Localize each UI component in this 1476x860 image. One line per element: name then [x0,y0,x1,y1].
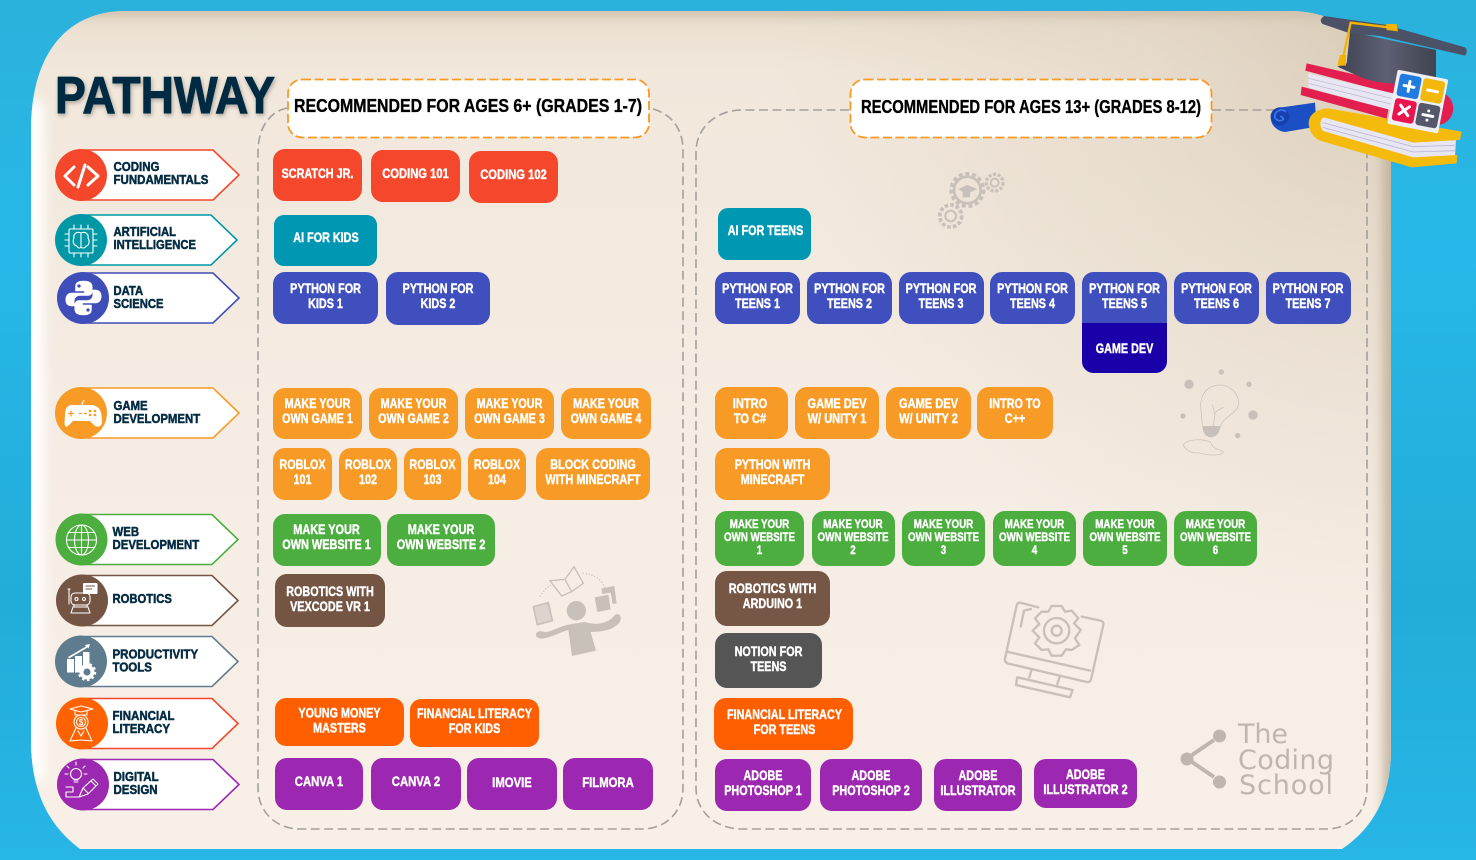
tag: financial literacy: FINANCIAL [112,708,175,723]
tag: digital design [57,758,239,810]
icon: chart and gear [67,644,95,680]
button: Website 5 teens: MAKE YOUR [1095,518,1155,531]
button: Python for Teens 3: PYTHON FOR [906,281,977,296]
tag: coding fundamentals: CODING [114,159,160,174]
button: Python for Teens 6: TEENS 6 [1194,296,1239,311]
button: Website 3 teens: OWN WEBSITE [908,531,979,544]
tag: financial literacy: LITERACY [112,721,170,736]
icon: chip brain [65,225,97,257]
button: Python for Teens 6: PYTHON FOR [1181,281,1252,296]
button: Intro to C++: C++ [1005,411,1025,426]
tag: robotics: ROBOTICS [112,591,172,606]
button: Notion for Teens: NOTION FOR [735,644,803,659]
icon: graduate with dollar [70,706,93,741]
button: Filmora [563,758,653,810]
button: Python for Teens 1 [715,272,800,324]
button: Make Your Own Game 1: OWN GAME 1 [282,411,353,426]
button: Young Money Masters: MASTERS [313,720,366,736]
tag: productivity tools: TOOLS [112,660,152,675]
button: Python with Minecraft: MINECRAFT [741,472,805,487]
button: Block Coding with Minecraft [536,448,650,500]
title: PATHWAY [55,67,275,125]
button: AI for Kids: AI FOR KIDS [293,230,359,245]
button: Scratch Jr: SCRATCH JR. [282,166,353,181]
button: Python for Kids 2: KIDS 2 [421,296,456,311]
tag: financial literacy [56,698,238,750]
left column: coding buttons [273,149,558,203]
button: Intro to C# [715,387,788,439]
button: Python for Teens 1: PYTHON FOR [722,281,793,296]
button: Website 2 teens: 2 [850,544,856,557]
button: Python for Teens 2: TEENS 2 [827,296,872,311]
button: Python for Teens 5: PYTHON FOR [1089,281,1160,296]
button: Make Your Own Website 1 [273,514,381,566]
button: Website 2 teens [812,511,895,566]
button: Notion for Teens: TEENS [750,659,787,674]
button: Website 1 teens [715,511,804,566]
button: iMovie: IMOVIE [492,775,532,790]
tag: web development [56,514,238,566]
logo: The Coding School [1180,719,1334,801]
button: Game Dev w/ Unity 1: GAME DEV [808,396,867,411]
button: Roblox 102: ROBLOX [345,457,392,472]
button: Game Dev (dark base) [1082,323,1167,373]
button: Adobe Illustrator 2: ADOBE [1066,767,1105,782]
scroll [1271,103,1317,132]
tag: data science [57,272,239,324]
tag: data science: DATA [114,283,143,298]
button: Intro to C#: INTRO [733,396,768,411]
button: Make Your Own Website 2: OWN WEBSITE 2 [397,537,485,552]
button: Make Your Own Website 2 [387,514,495,566]
icon: globe [66,525,96,555]
tag: productivity tools [55,636,238,688]
heading: ages 13+ [850,80,1212,138]
button: Python for Kids 2: PYTHON FOR [403,281,474,296]
button: Make Your Own Game 4: MAKE YOUR [573,396,639,411]
button: Python for Teens 4: TEENS 4 [1010,296,1055,311]
button: Financial Literacy for Kids [410,699,539,747]
button: Python for Teens 3 [899,272,984,324]
button: Roblox 103 [404,448,461,500]
button: Adobe Illustrator 2: ILLUSTRATOR 2 [1043,782,1128,797]
tag: game development [55,387,239,439]
button: Roblox 102 [339,448,397,500]
icon: code brackets [65,165,98,187]
logo: The Coding School: Coding [1238,745,1334,776]
watermark: monitor with gear [1005,603,1103,697]
button: Game Dev w/ Unity 1 [795,387,879,439]
tag: data science: SCIENCE [114,296,164,311]
button: Filmora: FILMORA [582,775,634,790]
button: Adobe Photoshop 2: PHOTOSHOP 2 [832,783,910,798]
icon: python logo [66,281,102,315]
button: Make Your Own Website 1: OWN WEBSITE 1 [282,537,371,552]
button: Make Your Own Game 4: OWN GAME 4 [571,411,642,426]
button: Website 1 teens: OWN WEBSITE [724,531,795,544]
watermark: lightbulb and hand [1180,369,1258,455]
button: AI for Kids [274,215,377,266]
button: Make Your Own Game 3: MAKE YOUR [477,396,543,411]
button: Robotics with VEXcode VR 1: VEXCODE VR 1 [290,599,370,614]
button: Coding 101: CODING 101 [382,166,449,181]
tag: web development: WEB [112,524,139,539]
button: Young Money Masters: YOUNG MONEY [298,705,381,721]
button: Python for Kids 2 [386,272,490,325]
button: Roblox 102: 102 [359,472,377,487]
button: Python for Teens 5: TEENS 5 [1102,296,1147,311]
button: Make Your Own Website 2: MAKE YOUR [408,522,474,537]
button: Adobe Photoshop 1 [715,759,811,811]
tag: game development: GAME [114,398,148,413]
button: Make Your Own Game 2 [369,388,458,439]
tag: game development: DEVELOPMENT [114,411,201,426]
heading: ages 6+: RECOMMENDED FOR AGES 6+ (GRADES 1-7) [294,95,642,116]
button: Python with Minecraft [715,448,830,500]
button: Robotics with Arduino 1: ARDUINO 1 [743,596,802,611]
button: Canva 2 [371,758,461,810]
button: Financial Literacy for Teens: FINANCIAL LITERACY [727,707,842,722]
button: Python for Teens 5 [1082,272,1167,323]
logo: The Coding School: The [1237,719,1288,750]
button: iMovie [467,758,557,810]
button: AI for Teens: AI FOR TEENS [728,223,803,238]
button: Block Coding with Minecraft: WITH MINECRAFT [545,472,641,487]
button: Game Dev w/ Unity 1: W/ UNITY 1 [808,411,867,426]
button: Website 3 teens: MAKE YOUR [914,518,973,531]
button: Roblox 103: 103 [423,472,442,487]
right dashed frame [696,110,1367,829]
button: Make Your Own Game 1 [273,388,362,439]
tag: coding fundamentals [55,149,239,201]
heading: ages 6+ [288,80,649,138]
button: Canva 2: CANVA 2 [392,774,440,789]
button: Website 4 teens: 4 [1032,544,1038,557]
button: Website 3 teens [902,511,985,566]
button: Robotics with VEXcode VR 1 [275,574,385,627]
button: Roblox 103: ROBLOX [409,457,456,472]
button: Game Dev w/ Unity 2: GAME DEV [899,396,959,411]
button: Make Your Own Game 3: OWN GAME 3 [474,411,545,426]
button: Make Your Own Game 3 [465,388,554,439]
logo: The Coding School: School [1239,770,1333,801]
yellow book [1309,108,1462,167]
red book [1301,63,1453,125]
button: Scratch Jr [273,149,362,201]
button: Game Dev w/ Unity 2: W/ UNITY 2 [899,411,958,426]
tag: digital design: DIGITAL [114,769,159,784]
button: Adobe Photoshop 2 [820,759,922,811]
button: Python for Teens 6 [1174,272,1259,324]
button: Python for Teens 4 [990,272,1075,324]
button: AI for Teens [718,208,811,260]
button: Python for Teens 3: TEENS 3 [918,296,964,311]
button: Adobe Illustrator 2 [1034,759,1137,808]
button: Website 4 teens: MAKE YOUR [1005,518,1064,531]
button: Block Coding with Minecraft: BLOCK CODING [550,457,636,472]
button: Website 5 teens [1083,511,1167,566]
button: Adobe Photoshop 1: ADOBE [744,768,782,783]
button: Notion for Teens [715,633,822,688]
button: Make Your Own Game 2: OWN GAME 2 [378,411,449,426]
watermark: gears with cap [940,174,1003,227]
tag: artificial intelligence: ARTIFICIAL [114,224,176,239]
button: Young Money Masters [275,698,404,746]
button: Intro to C++: INTRO TO [989,396,1041,411]
heading: ages 13+: RECOMMENDED FOR AGES 13+ (GRADES 8-12) [861,96,1201,117]
button: Make Your Own Game 2: MAKE YOUR [381,396,447,411]
button: Intro to C#: TO C# [734,411,766,426]
button: Python for Kids 1: PYTHON FOR [290,281,361,296]
button: Roblox 101 [273,448,332,500]
button: Python for Teens 7: PYTHON FOR [1273,281,1344,296]
button: Adobe Illustrator 1: ADOBE [959,768,997,783]
button: Python for Teens 7 [1266,272,1351,324]
tag: digital design: DESIGN [114,782,158,797]
cap body [1337,32,1436,84]
button: Financial Literacy for Kids: FOR KIDS [449,721,500,736]
button: Website 5 teens: OWN WEBSITE [1090,531,1160,544]
button: Python with Minecraft: PYTHON WITH [735,457,810,472]
tag: financial literacy: $ [79,718,84,727]
button: Roblox 104 [468,448,526,500]
button: Roblox 101: ROBLOX [279,457,326,472]
button: Canva 1: CANVA 1 [295,774,343,789]
watermark: juggling person [533,567,621,656]
button: Adobe Photoshop 2: ADOBE [852,768,890,783]
button: Adobe Illustrator 1 [934,759,1022,811]
button: Python for Teens 2: PYTHON FOR [814,281,885,296]
button: Website 4 teens: OWN WEBSITE [999,531,1070,544]
button: Website 3 teens: 3 [941,544,946,557]
tag: coding fundamentals: FUNDAMENTALS [114,172,208,187]
button: Website 1 teens: MAKE YOUR [730,518,789,531]
button: Roblox 101: 101 [293,472,312,487]
button: Game Dev w/ Unity 2 [886,387,971,439]
button: Website 6 teens [1174,511,1257,566]
button: Make Your Own Game 1: MAKE YOUR [285,396,351,411]
icon: gamepad [64,400,102,427]
button: Canva 1 [275,758,363,810]
button: Adobe Photoshop 1: PHOTOSHOP 1 [724,783,802,798]
tag: artificial intelligence: INTELLIGENCE [114,237,196,252]
button: Financial Literacy for Teens: FOR TEENS [754,722,815,737]
button: Website 4 teens [993,511,1076,566]
button: Coding 101 [371,150,460,202]
button: Website 6 teens: OWN WEBSITE [1180,531,1251,544]
button: Financial Literacy for Kids: FINANCIAL LITERACY [417,706,532,721]
button: Python for Teens 7: TEENS 7 [1285,296,1331,311]
button: Python for Teens 2 [807,272,892,324]
button: Roblox 104: ROBLOX [474,457,521,472]
tag: web development: DEVELOPMENT [112,537,200,552]
tag: robotics [56,574,238,626]
button: Robotics with Arduino 1 [715,571,830,626]
button: Website 5 teens: 5 [1122,544,1128,557]
button: Robotics with VEXcode VR 1: ROBOTICS WITH [286,584,374,599]
button: Coding 102: CODING 102 [480,167,547,182]
button: Adobe Illustrator 1: ILLUSTRATOR [940,783,1016,798]
illustration: cap and books [1271,16,1467,167]
icon: bulb and pencil [65,762,98,797]
button: Website 6 teens: 6 [1213,544,1218,557]
button: Website 2 teens: OWN WEBSITE [818,531,888,544]
cap board [1321,16,1467,56]
button: Python for Teens 1: TEENS 1 [735,296,780,311]
button: Make Your Own Website 1: MAKE YOUR [293,522,360,537]
button: Website 1 teens: 1 [757,544,762,557]
button: Roblox 104: 104 [488,472,506,487]
left dashed frame [258,108,683,829]
button: Robotics with Arduino 1: ROBOTICS WITH [729,581,816,596]
button: Coding 102 [469,151,558,203]
button: Financial Literacy for Teens [714,698,853,750]
tag: productivity tools: PRODUCTIVITY [112,647,198,662]
tag: artificial intelligence [55,214,237,266]
button: Make Your Own Game 4 [561,388,651,439]
calculator [1387,70,1448,133]
button: Game Dev (dark base): GAME DEV [1096,341,1154,356]
button: Python for Kids 1 [273,272,378,324]
button: Website 6 teens: MAKE YOUR [1186,518,1245,531]
button: Website 2 teens: MAKE YOUR [823,518,883,531]
button: Intro to C++ [977,387,1053,439]
button: Python for Teens 4: PYTHON FOR [997,281,1068,296]
tassel [1337,23,1398,66]
icon: robot [68,583,98,613]
button: Python for Kids 1: KIDS 1 [308,296,343,311]
